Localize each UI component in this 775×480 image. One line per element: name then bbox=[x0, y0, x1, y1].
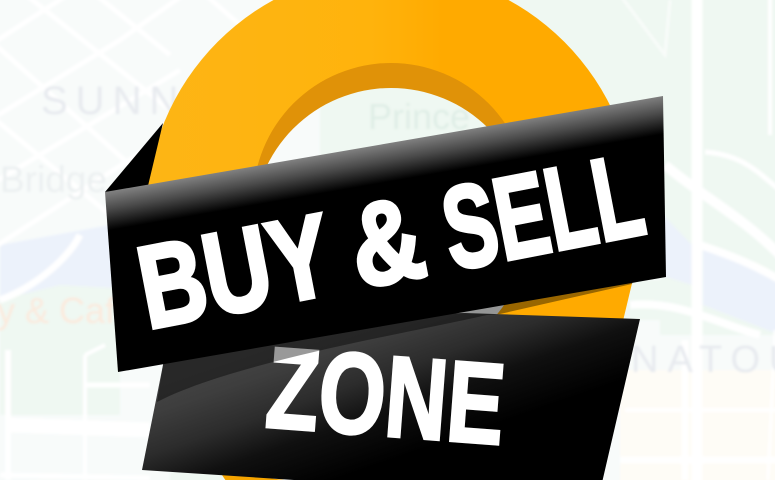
map label: Prince: Prince bbox=[368, 96, 470, 137]
map: cream district bbox=[620, 370, 775, 480]
map: roads right bbox=[620, 0, 775, 480]
ribbon: BUY & SELL bbox=[105, 96, 666, 372]
heading: BUY & SELL: BUY bbox=[128, 188, 342, 354]
icon: orange location pin bbox=[146, 0, 636, 480]
map label: Bridge: Bridge bbox=[0, 159, 107, 200]
map label: SUNN: SUNN bbox=[41, 79, 186, 123]
ribbon cast shadow bbox=[157, 265, 640, 402]
map: water areas bbox=[0, 215, 775, 335]
map: diagonal streets bbox=[0, 0, 240, 250]
map: roads left bbox=[0, 235, 150, 480]
heading: BUY & SELL bbox=[128, 128, 653, 354]
ribbon fold bbox=[105, 123, 163, 192]
map label: cafe: y & Caf bbox=[0, 290, 116, 331]
banner: ZONE bbox=[142, 313, 640, 480]
heading: BUY & SELL: & bbox=[339, 171, 434, 313]
heading: ZONE: ZONE bbox=[262, 324, 509, 469]
heading: BUY & SELL: SELL bbox=[432, 128, 653, 295]
